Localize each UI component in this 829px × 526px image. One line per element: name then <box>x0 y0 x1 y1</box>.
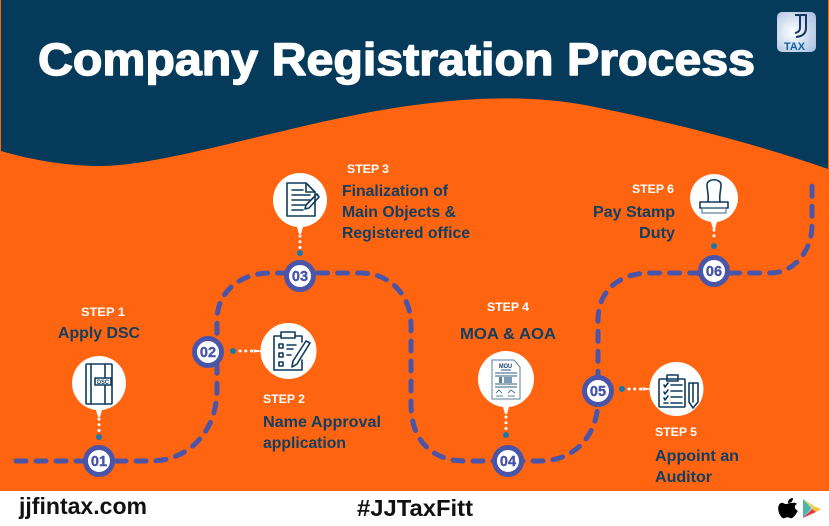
step 2 title <box>263 414 381 452</box>
step 4 group <box>460 300 556 474</box>
marker 04 <box>494 448 522 474</box>
step 1 title: Apply DSC <box>58 325 140 342</box>
marker 06 <box>700 258 728 284</box>
title: Company Registration Process <box>38 34 755 85</box>
footer bar <box>0 491 829 526</box>
step 6 group <box>593 174 738 284</box>
step 4 group: 04 <box>500 454 516 470</box>
step 2 group <box>194 323 381 452</box>
marker 05 <box>584 378 612 404</box>
step 2 label: STEP 2 <box>263 392 305 406</box>
marker 02 <box>194 338 222 366</box>
step 6 label: STEP 6 <box>632 182 674 196</box>
marker 03 <box>286 262 314 290</box>
connector 1 <box>98 419 100 431</box>
icon: stamp <box>700 180 728 213</box>
step 5 group: 05 <box>590 384 606 400</box>
logo: JJ Tax: TAX <box>784 41 806 53</box>
icon: DSC book: DSC <box>97 380 110 386</box>
step 3 title: Finalization of <box>342 183 449 200</box>
step 6 bubble <box>690 174 738 229</box>
step 6 group: 06 <box>706 264 722 280</box>
step 2 group: 02 <box>200 345 216 361</box>
step 5 title <box>655 448 739 486</box>
step 3 bubble <box>273 173 327 234</box>
step 3 title <box>342 183 470 242</box>
step 5 label: STEP 5 <box>655 425 697 439</box>
step 1 bubble <box>72 356 126 417</box>
footer website: jjfintax.com <box>18 493 147 519</box>
step 5 title: Auditor <box>655 469 712 486</box>
connector 3 <box>298 236 302 248</box>
icon: document with pen <box>287 183 319 216</box>
step 1 group: 01 <box>91 454 107 470</box>
icon: checklist <box>274 332 310 370</box>
connector 2 <box>230 348 236 354</box>
step 5 bubble <box>643 363 703 416</box>
icon: MOU document: MOU <box>499 363 512 370</box>
step 4 label: STEP 4 <box>487 300 529 314</box>
connector 5 <box>619 386 625 392</box>
step 1 group <box>58 305 140 474</box>
step 3 title: Registered office <box>342 225 470 242</box>
icon: MOU document <box>492 360 520 399</box>
connector 6 <box>712 230 716 241</box>
icon: apple <box>778 498 798 518</box>
connector 4 <box>504 417 508 429</box>
step 3 group <box>273 162 470 290</box>
step 2 bubble <box>254 323 316 378</box>
dashed process path <box>16 183 812 461</box>
header wave <box>1 0 828 169</box>
marker 01 <box>86 448 112 474</box>
step 5 title: Appoint an <box>655 448 739 465</box>
step 3 label: STEP 3 <box>347 162 389 176</box>
step 3 group: 03 <box>292 269 308 285</box>
step 4 title: MOA & AOA <box>460 326 556 343</box>
step 2 title: Name Approval <box>263 414 381 431</box>
step 4 bubble <box>478 351 534 414</box>
step 6 title: Pay Stamp <box>593 204 675 221</box>
step 2 title: application <box>263 435 346 452</box>
icon: play store <box>803 499 821 518</box>
footer hashtag: #JJTaxFitt <box>357 495 473 521</box>
step 3 title: Main Objects & <box>342 204 456 221</box>
step 6 title: Duty <box>639 225 675 242</box>
logo: JJ Tax <box>777 12 816 53</box>
step 1 label: STEP 1 <box>81 305 125 319</box>
icon: DSC book <box>86 364 112 404</box>
step 5 group <box>584 363 739 486</box>
step 6 title <box>593 204 675 242</box>
icon: clipboard with pen <box>659 375 698 408</box>
